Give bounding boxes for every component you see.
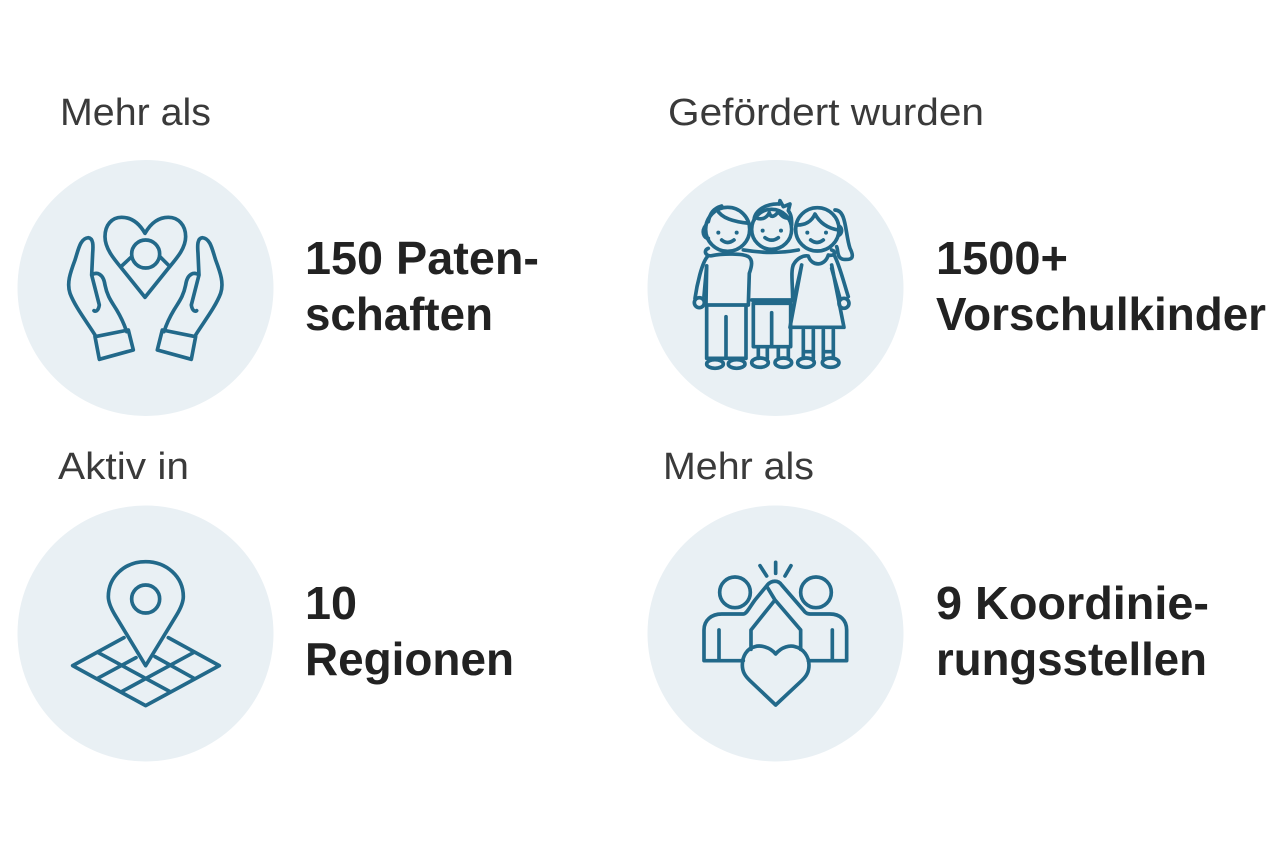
value: 150 Patenschaften: schaften <box>305 288 493 340</box>
value: 10 Regionen: Regionen <box>305 633 514 685</box>
value: 1500+ Vorschulkinder <box>936 232 1266 340</box>
icon: hands holding heart <box>69 217 222 359</box>
heading: Mehr als: Mehr als <box>663 446 814 488</box>
icon circle background <box>18 160 274 416</box>
icon circle background <box>18 506 274 762</box>
panel: Vorschulkinder <box>648 92 1266 416</box>
value: 1500+ Vorschulkinder: 1500+ <box>936 232 1068 284</box>
value: 9 Koordinierungsstellen: rungsstellen <box>936 633 1207 685</box>
value: 10 Regionen: 10 <box>305 577 357 629</box>
panel: Regionen <box>18 446 514 762</box>
value: 150 Patenschaften <box>305 232 539 340</box>
icon: three children <box>694 201 852 368</box>
icon: high five with heart <box>704 562 847 705</box>
heading: Gefördert wurden: Gefördert wurden <box>668 92 984 134</box>
icon: map pin on grid <box>73 562 219 706</box>
panel: Patenschaften <box>18 92 539 416</box>
panel: Koordinierungsstellen <box>648 446 1209 762</box>
heading: Aktiv in: Aktiv in <box>58 446 189 488</box>
value: 9 Koordinierungsstellen <box>936 577 1209 685</box>
value: 10 Regionen <box>305 577 514 685</box>
heading: Mehr als: Mehr als <box>60 92 211 134</box>
value: 9 Koordinierungsstellen: 9 Koordinie- <box>936 577 1209 629</box>
icon circle background <box>648 506 904 762</box>
icon circle background <box>648 160 904 416</box>
value: 1500+ Vorschulkinder: Vorschulkinder <box>936 288 1266 340</box>
value: 150 Patenschaften: 150 Paten- <box>305 232 539 284</box>
